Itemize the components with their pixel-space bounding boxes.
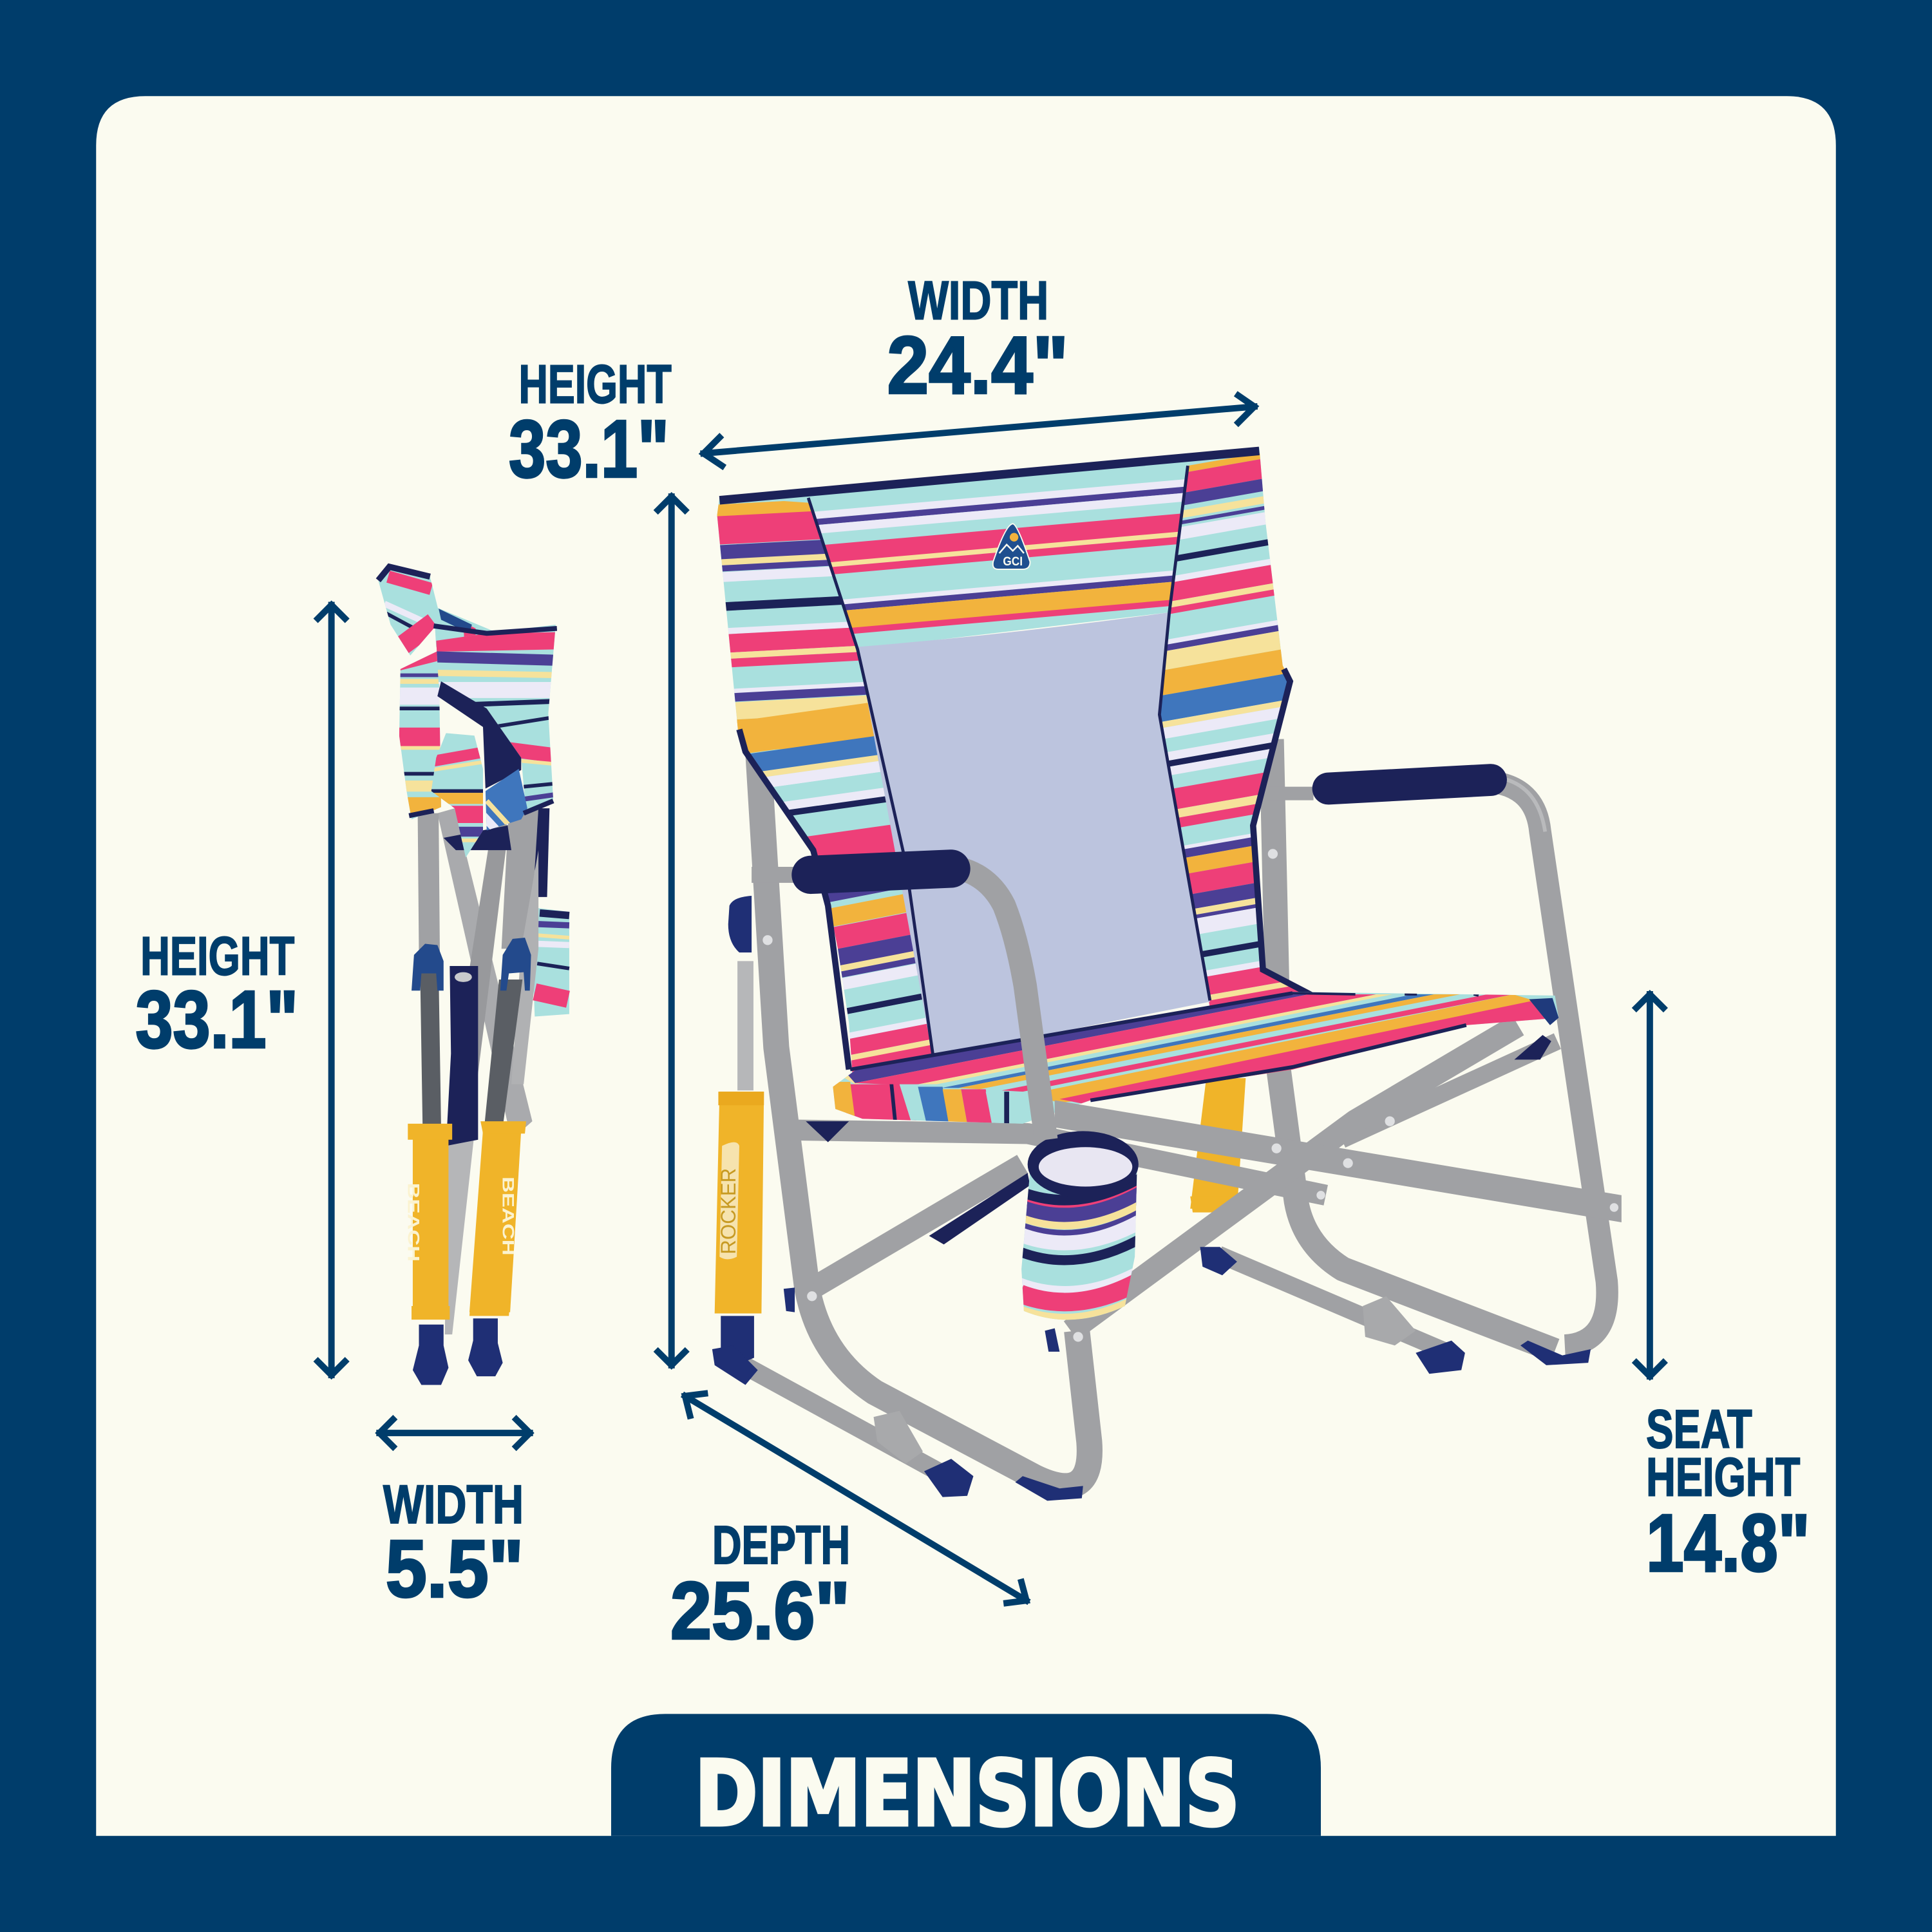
arrow: height [658, 497, 685, 1365]
folded cup holder [533, 808, 569, 1016]
arrow: width [703, 395, 1255, 466]
folding hinge brackets [874, 1296, 1416, 1464]
folded beach lettering [404, 1177, 517, 1262]
backrest fabric [660, 444, 1399, 1090]
fabric piping [808, 466, 1210, 1062]
label: open chair width: WIDTH [908, 270, 1048, 331]
folded strap [446, 966, 478, 1146]
folded beach lettering: BEACH [499, 1177, 517, 1256]
arm pad left [811, 869, 951, 875]
GCI logo badge: GCI [1003, 555, 1023, 569]
folded frame bars [418, 808, 538, 1334]
folded beach lettering: BEACH [404, 1183, 422, 1262]
cup holder [1020, 1131, 1144, 1320]
title tab: dimensions [611, 1714, 1321, 1846]
folded fabric right flap [431, 622, 561, 819]
GCI logo badge [993, 524, 1030, 569]
label: folded chair width [383, 1474, 524, 1615]
folded fabric top flap [370, 561, 444, 659]
label: depth: DEPTH [712, 1515, 850, 1575]
navy hardware [712, 896, 1591, 1501]
open chair [660, 444, 1622, 1501]
label: seat height: HEIGHT [1646, 1447, 1800, 1508]
label: open chair width [887, 270, 1068, 410]
label: seat height [1646, 1399, 1810, 1588]
folded fabric centre with logo [433, 606, 503, 647]
arrow: seat height [1636, 994, 1663, 1376]
arrow: folded height [318, 605, 345, 1375]
folded yellow tubes [408, 1121, 526, 1320]
folded fabric left column [394, 647, 450, 826]
title tab: dimensions: DIMENSIONS [695, 1741, 1240, 1846]
folded fabric [370, 561, 561, 862]
label: folded chair width: 5.5" [386, 1524, 524, 1615]
label: open chair height: HEIGHT [518, 354, 672, 415]
label: folded chair height: HEIGHT [140, 925, 294, 986]
arrow: depth [685, 1394, 1027, 1603]
label: open chair height: 33.1" [509, 403, 669, 494]
label: depth [670, 1515, 850, 1656]
armrest tube left [944, 866, 1046, 1140]
front yellow tube with rocker label [715, 1092, 764, 1314]
label: open chair width: 24.4" [887, 319, 1068, 410]
folded fabric lower flap [425, 727, 489, 862]
arrow: folded width [379, 1419, 530, 1446]
label: seat height: SEAT [1646, 1399, 1752, 1459]
navy strap under seat [929, 1173, 1030, 1244]
bar rivets and brackets [762, 849, 1618, 1342]
folded navy webbing [437, 681, 521, 788]
label: folded chair height [135, 925, 298, 1065]
crossing bars [739, 1025, 1518, 1477]
folded dark tubes [420, 973, 522, 1128]
rear frame [1190, 739, 1607, 1352]
folded fabric blue fold [480, 764, 530, 833]
main side bar [1055, 1101, 1622, 1222]
folded feet [413, 1318, 503, 1385]
top stripe panel [683, 444, 1307, 659]
arm pad right [1328, 780, 1491, 788]
label: seat height: 14.8" [1646, 1497, 1810, 1588]
left back post and front rocker [746, 746, 1090, 1486]
label: folded chair height: 33.1" [135, 974, 298, 1065]
right stripe panel [1063, 444, 1399, 1023]
folded navy clips [412, 938, 531, 990]
mesh centre panel [858, 612, 1210, 1057]
label: depth: 25.6" [670, 1566, 850, 1656]
front yellow tube with rocker label: ROCKER [717, 1168, 740, 1255]
label: open chair height [509, 354, 672, 494]
left stripe panel [660, 487, 999, 1090]
folded chair [370, 561, 569, 1385]
label: folded chair width: WIDTH [383, 1474, 524, 1535]
seat fabric [833, 992, 1558, 1124]
